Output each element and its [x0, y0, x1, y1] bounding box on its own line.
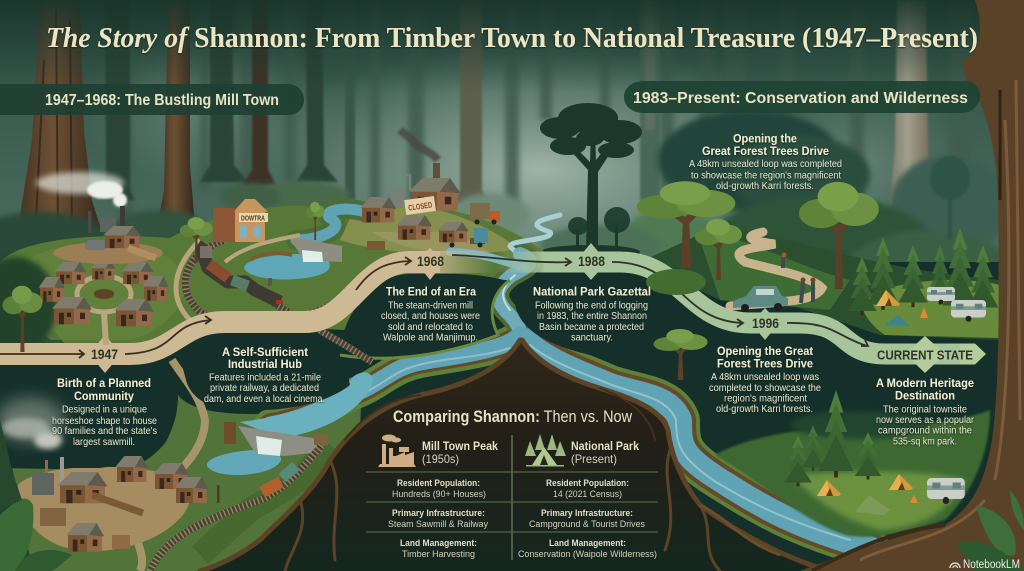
lower left land	[0, 360, 362, 571]
national park heading: National Park	[571, 439, 639, 453]
text block: national park gazettal: sanctuary.	[571, 332, 613, 344]
section banner: mill town: 1947–1968: The Bustling Mill Town	[45, 92, 279, 109]
table rules	[366, 435, 658, 560]
upper rail and dirt road	[176, 235, 372, 362]
text block: modern heritage destination: A Modern Heritage	[876, 376, 974, 390]
timeline node: 1947: 1947	[91, 346, 118, 362]
text block: opening the drive, 1996: old-growth Karri forests.	[716, 404, 813, 415]
text block: self-sufficient industrial hub: A Self-Sufficient	[222, 345, 308, 359]
distant dark tree right	[930, 156, 970, 240]
text block: birth of a planned community: horseshoe shape to house	[52, 416, 157, 427]
text block: modern heritage destination: campground within the	[878, 426, 972, 436]
ribbon: green timeline	[498, 262, 962, 354]
upper right forest and trees	[637, 181, 879, 295]
upper dam and pond	[244, 236, 342, 280]
text block: opening the drive, forest callout: Opening the	[733, 132, 797, 146]
text block: self-sufficient industrial hub: Industrial Hub	[228, 357, 302, 371]
text block: the end of an era: sold and relocated to	[388, 322, 473, 333]
upper left cabin ring village	[2, 260, 169, 352]
text block: birth of a planned community: 90 families and the state's	[52, 426, 157, 437]
title: The Story of Shannon: From Timber Town to National Treasure (1947–Present)	[46, 23, 978, 54]
mill town heading: Mill Town Peak	[422, 439, 498, 453]
now column rows	[518, 478, 657, 560]
then column rows: Resident Population:	[397, 478, 480, 489]
timeline node: 1988: 1988	[578, 253, 605, 269]
icon: factory	[378, 434, 416, 467]
timeline node: 1947	[89, 335, 121, 373]
now column rows: 14 (2021 Census)	[553, 489, 622, 500]
ribbon: tan fade	[420, 251, 495, 273]
left and centre upper land	[0, 204, 545, 353]
timeline node: current state: CURRENT STATE	[877, 348, 973, 362]
upper steam train	[202, 244, 283, 304]
bottom corner leaves	[0, 420, 1024, 571]
lower village and sawmill with smoke	[0, 398, 220, 552]
text block: self-sufficient industrial hub: private railway, a dedicated	[210, 383, 319, 394]
now column rows: Campground & Tourist Drives	[529, 519, 645, 530]
foliage on the horizon	[0, 110, 1020, 330]
far tree trunks	[120, 0, 970, 240]
big left trunks	[10, 0, 194, 248]
upper left sawmill with white smoke	[36, 172, 163, 264]
text block: opening the drive, 1996: Opening the Great	[717, 344, 813, 358]
now column rows: Land Management:	[549, 538, 626, 549]
now column rows: Resident Population:	[546, 478, 629, 489]
text block: opening the drive, 1996: Forest Trees Drive	[717, 356, 813, 370]
lower right campground	[654, 329, 990, 537]
text block: national park gazettal: National Park Gazettal	[533, 284, 651, 298]
section banner: mill town	[0, 84, 304, 115]
text block: national park gazettal: in 1983, the entire Shannon	[537, 311, 647, 322]
mid tree trunks	[100, 0, 660, 205]
text block: modern heritage destination: 535-sq km park.	[893, 436, 957, 448]
top shade behind title	[0, 0, 1024, 92]
text block: modern heritage destination: now serves as a popular	[876, 415, 975, 426]
upper right pines and camp	[847, 228, 998, 326]
timeline node: 1996: 1996	[752, 315, 779, 331]
text block: opening the drive, 1996: A 48km unsealed loop was	[711, 372, 819, 383]
icon: tent and trees	[525, 434, 566, 466]
general store	[180, 199, 325, 263]
text block: modern heritage destination: Destination	[895, 388, 955, 402]
winding scenic road	[730, 232, 822, 306]
then column rows	[388, 478, 488, 560]
text block: opening the drive, 1996: completed to showcase the	[709, 383, 821, 394]
dark panels for text	[0, 273, 730, 468]
ribbon: tan timeline	[0, 262, 440, 354]
right forest clearing	[640, 225, 1000, 340]
soil and roots under the river	[200, 340, 830, 571]
timeline node: current state	[877, 336, 973, 373]
text block: national park gazettal	[533, 284, 651, 344]
text block: opening the drive, forest callout: old-growth Karri forests.	[716, 181, 814, 192]
then column rows: Primary Infrastructure:	[392, 508, 485, 519]
text block: opening the drive, forest callout: A 48km unsealed loop was completed	[689, 159, 842, 170]
timeline node: 1996	[751, 308, 779, 340]
text block: the end of an era: The End of an Era	[386, 284, 476, 298]
text block: birth of a planned community: Designed in a unique	[62, 404, 147, 416]
text block: opening the drive, 1996	[709, 344, 821, 415]
national park period: (Present)	[571, 452, 617, 466]
text block: the end of an era: Walpole and Manjimup.	[383, 332, 478, 344]
general store: DOWTRA	[241, 216, 265, 222]
timeline node: 1988	[575, 243, 607, 280]
now column rows: Primary Infrastructure:	[541, 508, 633, 519]
timeline arrows	[0, 255, 868, 358]
section banner: conservation	[624, 81, 980, 113]
lower reservoir and dam	[207, 372, 373, 475]
text block: opening the drive, forest callout: Great Forest Trees Drive	[702, 144, 829, 158]
section banner: conservation: 1983–Present: Conservation and Wilderness	[633, 90, 968, 107]
text block: the end of an era: closed, and houses were	[381, 311, 480, 322]
text block: modern heritage destination	[876, 376, 975, 448]
lower railway and train	[150, 445, 322, 571]
river upper left	[296, 209, 366, 240]
now column rows: Conservation (Waipole Wilderness)	[518, 549, 657, 560]
abandoned mill with closed sign	[360, 130, 500, 250]
text block: national park gazettal: Following the end of logging	[535, 300, 648, 312]
central dark silhouette tree	[540, 103, 642, 259]
text block: the end of an era: The steam-driven mill	[388, 300, 473, 312]
then column rows: Steam Sawmill & Railway	[388, 519, 488, 530]
text block: opening the drive, 1996: region's magnificent	[724, 394, 807, 404]
text block: self-sufficient industrial hub	[204, 345, 325, 405]
mill town period: (1950s)	[422, 452, 459, 466]
main river with branches	[270, 215, 870, 548]
text block: self-sufficient industrial hub: Features included a 21-mile	[209, 372, 321, 384]
text block: modern heritage destination: The original townsite	[883, 404, 967, 416]
arrowhead: current state	[960, 344, 986, 364]
text block: national park gazettal: Basin became a protected	[539, 322, 644, 333]
timeline node: 1968: 1968	[417, 253, 444, 269]
car and walkers	[733, 252, 816, 312]
then column rows: Land Management:	[400, 538, 477, 549]
timeline node: 1968	[416, 248, 444, 280]
text block: birth of a planned community: Community	[74, 389, 134, 403]
then column rows: Hundreds (90+ Houses)	[392, 489, 486, 500]
big right tree with roots	[700, 0, 1024, 571]
comparison panel	[366, 407, 658, 560]
dark base ground	[0, 262, 1024, 571]
text block: birth of a planned community: Birth of a Planned	[57, 376, 151, 390]
text block: self-sufficient industrial hub: dam, and even a local cinema.	[204, 394, 325, 405]
comparison heading: Comparing Shannon: Then vs. Now	[393, 407, 633, 426]
then column rows: Timber Harvesting	[402, 549, 475, 560]
abandoned mill with closed sign: CLOSED	[408, 200, 433, 213]
text block: the end of an era	[381, 284, 480, 344]
text block: birth of a planned community	[52, 376, 157, 448]
pale giant trunk right	[878, 0, 944, 236]
text block: opening the drive, forest callout: to showcase the region's magnificent	[691, 170, 841, 182]
text block: opening the drive, forest callout	[689, 132, 842, 192]
text block: birth of a planned community: largest sawmill.	[73, 437, 135, 448]
